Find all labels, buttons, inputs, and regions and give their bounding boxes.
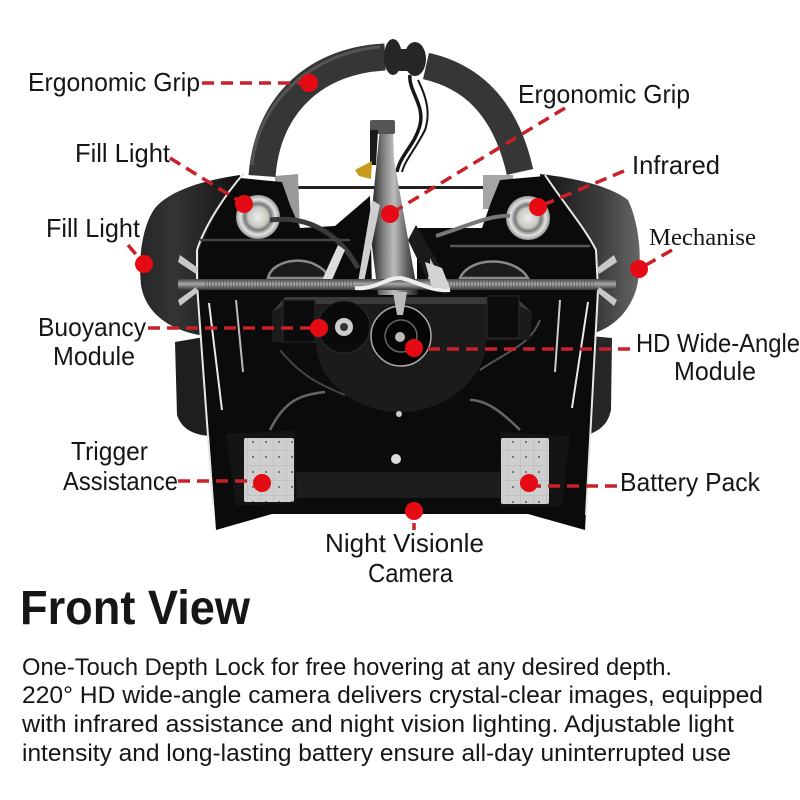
description text: intensity and long-lasting battery ensure all-day uninterrupted use <box>22 740 731 767</box>
rear crossbar and brackets <box>275 174 513 240</box>
callout labels: Infrared <box>632 150 720 180</box>
left camera port <box>318 301 370 353</box>
description text: One-Touch Depth Lock for free hovering at any desired depth. <box>22 654 672 681</box>
description text: 220° HD wide-angle camera delivers crystal-clear images, equipped <box>22 682 763 709</box>
callout labels: Assistance <box>63 466 178 496</box>
callout labels: Fill Light <box>75 138 171 168</box>
title: Front View <box>20 582 251 635</box>
callout labels <box>28 67 800 588</box>
callout labels: Battery Pack <box>620 467 761 497</box>
callout labels: Camera <box>368 558 453 588</box>
callout dots <box>135 74 648 520</box>
callout labels: Trigger <box>71 436 148 466</box>
threaded rod with wing nuts <box>178 255 617 306</box>
white frame edge lines <box>197 173 598 515</box>
callout labels: Module <box>53 341 135 371</box>
right LED panel <box>500 432 570 506</box>
left LED panel <box>226 430 297 506</box>
interior motors and cables <box>200 216 590 430</box>
description text: with infrared assistance and night vision lighting. Adjustable light <box>21 711 734 738</box>
product photo: underwater vehicle front view <box>140 39 640 530</box>
lower crossbar <box>295 411 500 498</box>
callout leader lines <box>128 83 672 530</box>
central mast <box>355 120 446 295</box>
frame body <box>199 176 597 530</box>
right camera lens <box>371 292 431 366</box>
callout labels: Mechanise <box>649 225 756 251</box>
side pontoons <box>140 174 640 436</box>
callout labels: Fill Light <box>46 213 141 243</box>
lamps <box>236 195 550 240</box>
callout labels: Buoyancy <box>38 312 146 342</box>
callout labels: Ergonomic Grip <box>518 79 690 109</box>
description text <box>21 654 763 767</box>
callout labels: Module <box>674 356 756 386</box>
callout labels: Night Visionle <box>325 528 484 558</box>
callout labels: Ergonomic Grip <box>28 67 200 97</box>
camera plate <box>272 296 532 412</box>
handle <box>252 39 520 176</box>
